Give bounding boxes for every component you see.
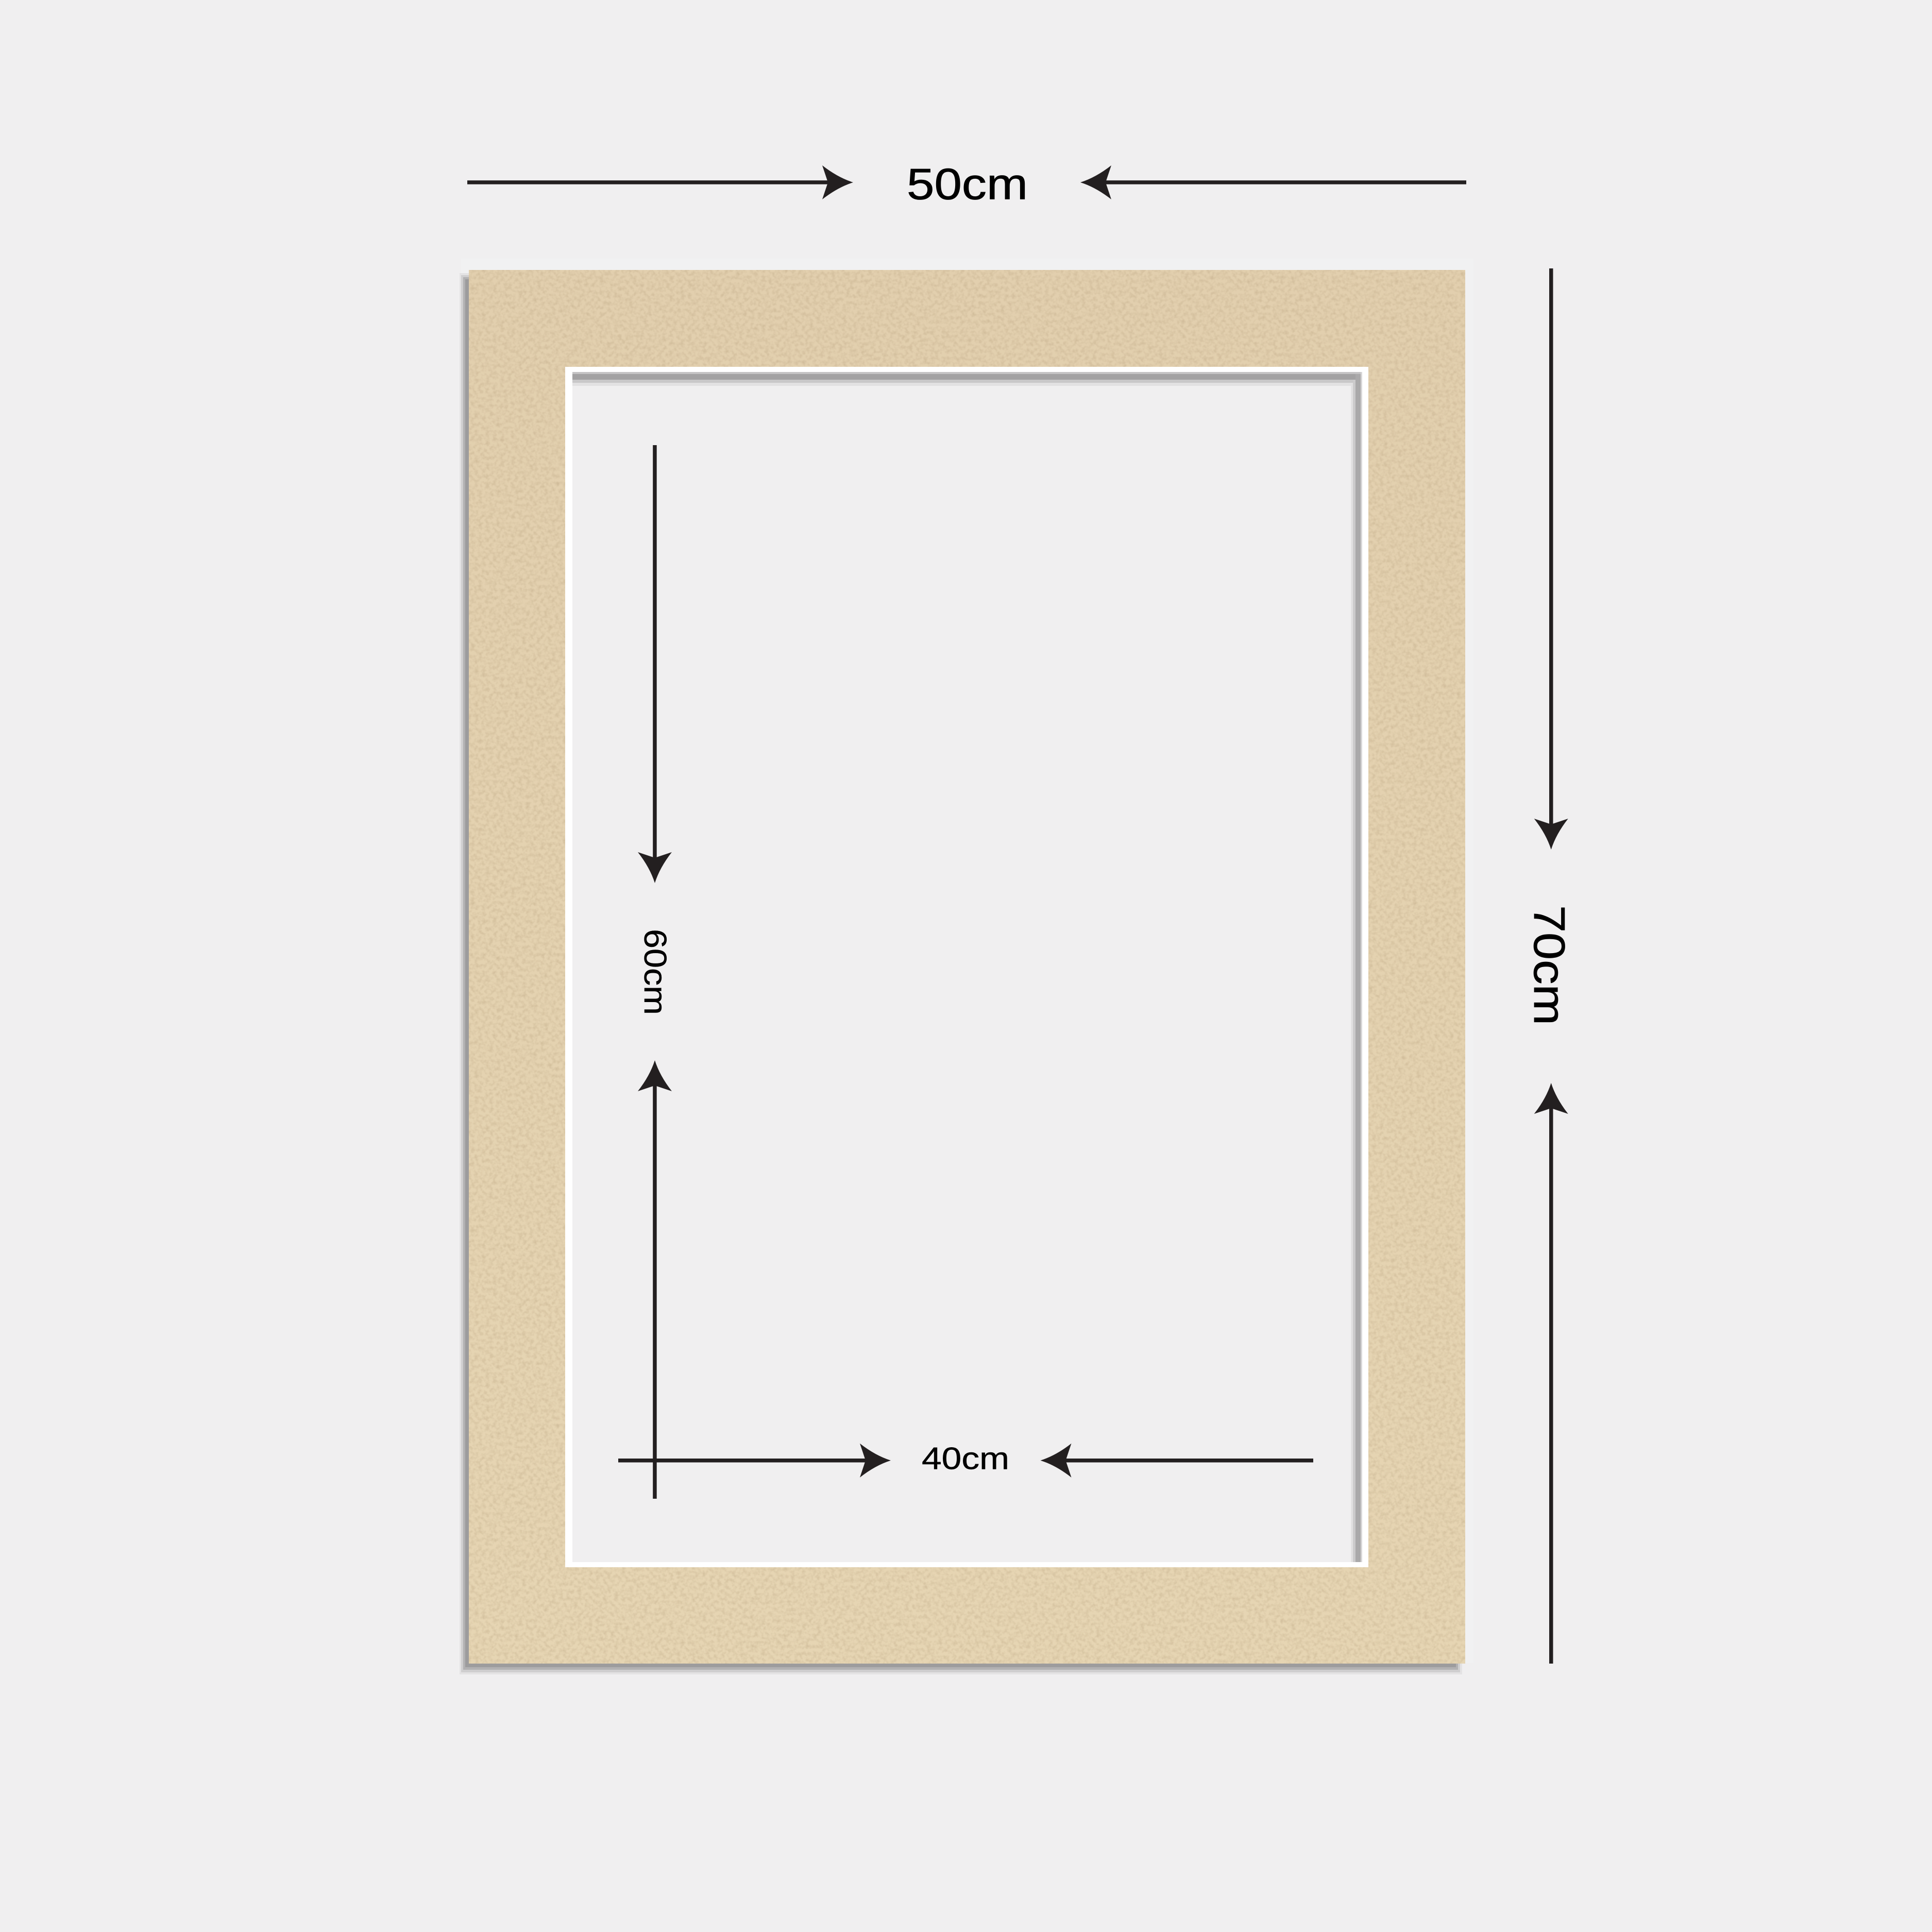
mat surface	[469, 270, 1465, 1664]
infographic canvas	[460, 165, 1568, 1674]
dimension: opening height 60cm	[638, 445, 673, 1499]
mat drop shadow	[460, 273, 1462, 1674]
arrow: left pointing inward	[618, 1444, 891, 1478]
arrow: bottom pointing inward	[638, 1060, 672, 1499]
mat highlight halo	[461, 259, 1473, 1663]
label: 50cm: 50cm	[907, 160, 1028, 209]
label: 60cm: 60cm	[638, 929, 673, 1015]
white bevel	[565, 367, 1368, 1567]
arrow: top pointing inward	[1534, 268, 1568, 850]
arrow: bottom pointing inward	[1534, 1083, 1568, 1664]
label: 40cm: 40cm	[922, 1442, 1009, 1476]
arrow: top pointing inward	[638, 445, 672, 883]
arrow: right pointing inward	[1041, 1444, 1313, 1478]
window opening with inner shadow	[572, 372, 1362, 1562]
dimension: outer width 50cm	[467, 160, 1466, 209]
dimension: outer height 70cm	[1524, 268, 1573, 1664]
arrow: right pointing inward	[1080, 165, 1466, 199]
arrow: left pointing inward	[467, 165, 853, 199]
panel: mat board	[460, 259, 1473, 1674]
dimension: opening width 40cm	[618, 1442, 1313, 1478]
label: 70cm: 70cm	[1524, 905, 1573, 1025]
